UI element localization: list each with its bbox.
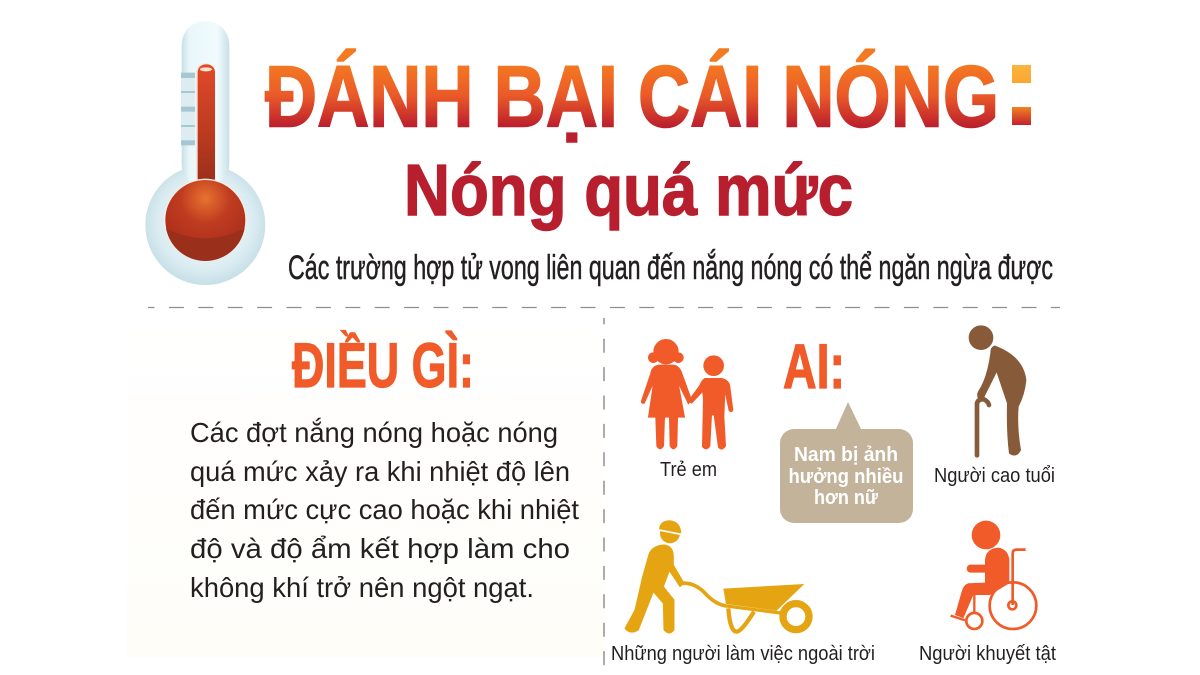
text block: what description: đến mức cực cao hoặc khi nhiệt bbox=[190, 494, 579, 525]
icon: person in wheelchair bbox=[951, 521, 1036, 629]
panel: what background bbox=[127, 310, 604, 657]
icon: thermometer bbox=[145, 21, 265, 285]
text block: what description: độ và độ ẩm kết hợp làm cho bbox=[190, 533, 570, 564]
label: children: Trẻ em bbox=[660, 458, 717, 481]
title: ĐÁNH BẠI CÁI NÓNG bbox=[265, 48, 999, 146]
text block: what description: Các đợt nắng nóng hoặc nóng bbox=[190, 417, 558, 448]
callout: men more affected: Nam bị ảnh bbox=[794, 444, 898, 466]
text block: what description bbox=[190, 417, 579, 603]
callout: men more affected: hơn nữ bbox=[814, 487, 878, 509]
label: elderly: Người cao tuổi bbox=[934, 464, 1055, 487]
icon: elderly person bbox=[969, 326, 1026, 455]
callout: men more affected bbox=[780, 402, 913, 523]
icon: outdoor worker with wheelbarrow bbox=[625, 520, 809, 633]
callout: men more affected: hưởng nhiều bbox=[788, 466, 904, 488]
icon: children bbox=[641, 339, 733, 449]
subtitle: Nóng quá mức: Nóng quá mức bbox=[404, 151, 853, 231]
label: outdoor workers: Những người làm việc ngoài trời bbox=[611, 642, 875, 665]
title colon bbox=[1012, 65, 1031, 125]
label: people with disabilities: Người khuyết tật bbox=[919, 642, 1056, 665]
heading: what: ĐIỀU GÌ: bbox=[292, 330, 474, 401]
text block: what description: không khí trở nên ngột ngạt. bbox=[190, 572, 534, 603]
heading: who: AI: bbox=[783, 332, 845, 402]
text block: what description: quá mức xảy ra khi nhiệt độ lên bbox=[190, 456, 570, 487]
